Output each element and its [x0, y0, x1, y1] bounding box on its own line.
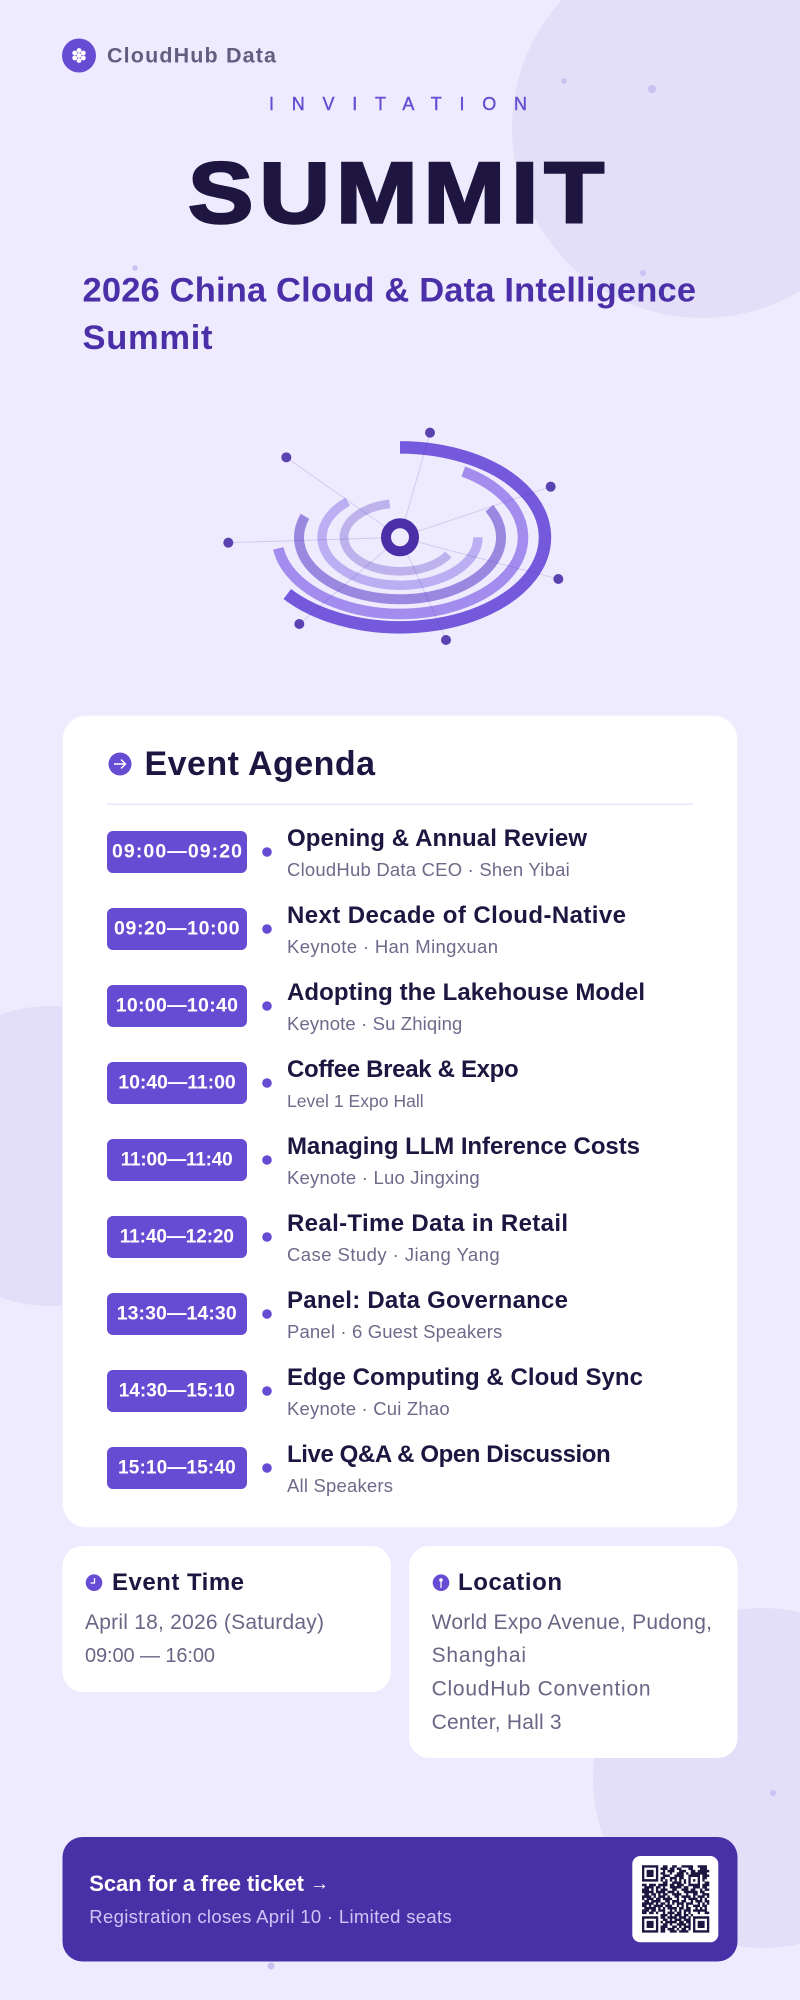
icon: clock	[86, 1574, 102, 1591]
eyebrow: invitation: INVITATION	[269, 94, 527, 114]
agenda item 9: 15:10—15:40	[118, 1458, 236, 1479]
agenda item 6: Real-Time Data in Retail	[287, 1210, 568, 1237]
agenda item 4	[107, 1056, 519, 1111]
satellite nodes	[223, 428, 563, 645]
agenda item 1: Opening & Annual Review	[287, 825, 587, 852]
panel: location	[409, 1546, 738, 1758]
agenda item 2: Next Decade of Cloud-Native	[287, 902, 626, 929]
center ring	[386, 523, 414, 551]
agenda item 6: Case Study · Jiang Yang	[287, 1244, 500, 1265]
agenda item 2: Keynote · Han Mingxuan	[287, 936, 498, 957]
cta note: Registration closes April 10 · Limited seats	[89, 1906, 452, 1927]
subtitle: Summit	[82, 319, 213, 357]
panel: event time	[62, 1546, 391, 1692]
connector lines	[228, 433, 558, 640]
illustration: concentric data rings	[223, 428, 563, 645]
agenda item 7: 13:30—14:30	[117, 1303, 237, 1325]
icon: agenda arrow	[108, 752, 132, 776]
agenda item 9: Live Q&A & Open Discussion	[287, 1441, 611, 1468]
agenda item 4: 10:40—11:00	[118, 1072, 236, 1094]
event date and hours: April 18, 2026 (Saturday)	[85, 1611, 324, 1634]
agenda item 2: 09:20—10:00	[114, 918, 240, 940]
agenda item 8: Keynote · Cui Zhao	[287, 1398, 450, 1419]
subtitle: 2026 China Cloud & Data Intelligence	[82, 272, 696, 310]
address lines: Shanghai	[432, 1644, 526, 1667]
agenda item 4: Coffee Break & Expo	[287, 1056, 519, 1083]
address lines: Center, Hall 3	[432, 1711, 562, 1734]
heading: event time: Event Time	[112, 1569, 244, 1596]
agenda item 5: Managing LLM Inference Costs	[287, 1133, 640, 1160]
agenda item 5: Keynote · Luo Jingxing	[287, 1167, 480, 1188]
cta heading: →	[310, 1874, 329, 1894]
agenda item 8: Edge Computing & Cloud Sync	[287, 1364, 643, 1391]
subtitle	[82, 272, 696, 357]
qr code	[632, 1856, 718, 1942]
panel: ticket call to action	[62, 1837, 738, 1962]
agenda item 8: 14:30—15:10	[119, 1381, 235, 1402]
ring arcs	[278, 447, 545, 627]
brand name: CloudHub Data	[107, 43, 277, 67]
agenda item 6: 11:40—12:20	[120, 1227, 234, 1248]
agenda item 6	[107, 1210, 568, 1265]
agenda item 9: All Speakers	[287, 1475, 393, 1496]
agenda item 3: Adopting the Lakehouse Model	[287, 979, 645, 1006]
background small dots	[132, 78, 776, 1970]
icon: logo badge	[62, 38, 96, 72]
agenda item 3: 10:00—10:40	[116, 995, 238, 1017]
agenda item 1: CloudHub Data CEO · Shen Yibai	[287, 859, 570, 880]
agenda item 4: Level 1 Expo Hall	[287, 1091, 424, 1111]
agenda item 1	[107, 825, 587, 880]
agenda item 7: Panel · 6 Guest Speakers	[287, 1321, 502, 1342]
agenda item 8	[107, 1364, 643, 1419]
heading: event agenda: Event Agenda	[144, 745, 376, 783]
agenda item 5: 11:00—11:40	[121, 1150, 233, 1171]
title: SUMMIT	[188, 145, 604, 241]
event date and hours	[85, 1611, 324, 1667]
address lines: World Expo Avenue, Pudong,	[432, 1611, 712, 1634]
agenda item 3: Keynote · Su Zhiqing	[287, 1013, 462, 1034]
address lines: CloudHub Convention	[432, 1678, 651, 1701]
agenda item 9	[107, 1441, 611, 1496]
agenda item 3	[107, 979, 645, 1034]
cta heading: Scan for a free ticket	[89, 1871, 305, 1896]
panel: event agenda	[62, 716, 738, 1528]
agenda item 7	[107, 1287, 568, 1342]
agenda item 1: 09:00—09:20	[112, 841, 242, 863]
brand logo	[62, 38, 277, 72]
event date and hours: 09:00 — 16:00	[85, 1645, 215, 1667]
address lines	[432, 1611, 712, 1734]
icon: location pin	[433, 1574, 449, 1591]
heading: location: Location	[458, 1569, 562, 1596]
agenda item 5	[107, 1133, 640, 1188]
agenda item 2	[107, 902, 626, 957]
agenda item 7: Panel: Data Governance	[287, 1287, 568, 1314]
